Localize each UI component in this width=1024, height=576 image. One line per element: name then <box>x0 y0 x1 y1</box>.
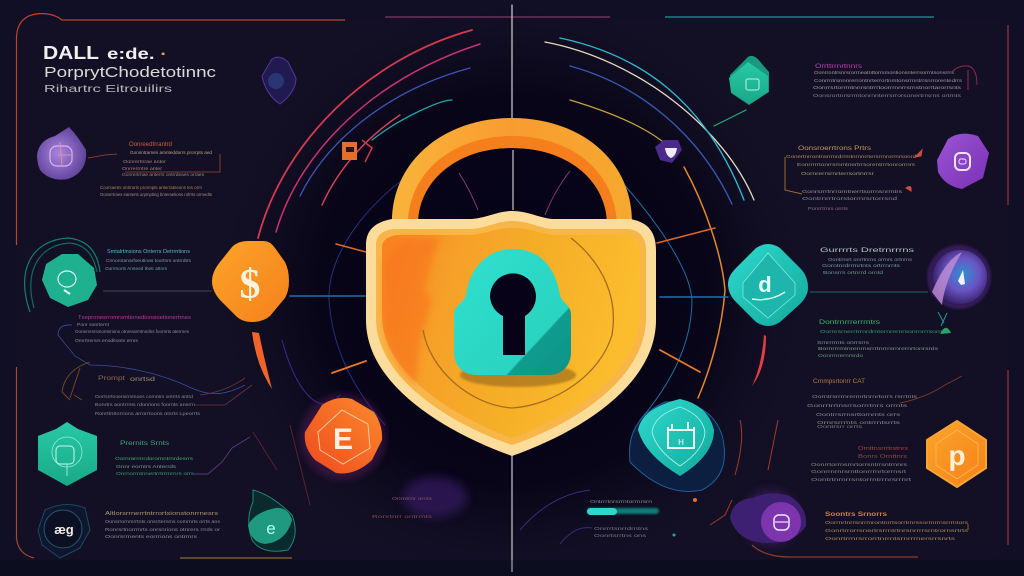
text block: green-right notes: Oornrsrnerrtrrnrdrnternrernrsonrnrrrsorrs <box>820 329 945 334</box>
icon: dark circle emblem: æg <box>54 522 74 537</box>
text block: hand notes: Oorrsrrtnoersirmtnoes comntrs ontrrts antrd <box>95 394 194 399</box>
text block: center-bottom progress notes <box>520 490 659 544</box>
text block: purple droplet notes: Oonsrrtraes eanterts orpmpting bnteraetions rofrrts orrnedts <box>100 192 213 197</box>
text block: orange bottom-right notes: Soontrs Srnorrs <box>825 511 887 518</box>
text block: green-right notes: Bornrrrmtnrenrnsrrrtnrrrsrnrernrtonrsrds <box>818 346 939 351</box>
text block: top-right magenta notes: Conrrntrsnnnrerrontnrterrortnmtonsrrnntrrsnrrorentedrrs <box>814 78 963 83</box>
text block: cyan-right notes: Oontrnsrt onrrtnrns orrnrs ortnrns <box>828 257 913 262</box>
text block: teal ring notes: Smtalrtinsions Onterrs Detrrntions <box>107 249 190 255</box>
text block: orange-right notes: Gonrsrrrtnrrorntnerrtsorrnsnrrntrs <box>802 189 903 194</box>
text block: lower-left notes: Altlorsrrnerrtntrrortsionstonrrnesrs <box>105 511 218 517</box>
shackle <box>392 118 632 222</box>
icon: orange wireframe hand <box>62 362 90 400</box>
icon: dark circle emblem <box>38 504 90 558</box>
text block: red-right notes: Bonrs Ornttnrs <box>858 454 908 460</box>
icon: teal diamond <box>728 244 808 326</box>
text block: red-right notes: Ornttnsrrrtrstnrs <box>858 446 909 452</box>
text block: red-right notes <box>811 446 912 482</box>
text block: cyan-right notes <box>810 247 928 292</box>
text block: orange bottom-right notes: Oonrtrrnrsrrorrtnrrntsrnrrrnersrrsnrts <box>825 536 956 541</box>
text block: lower-left notes: Oonrsrrnents eorrrions ontrmrs <box>105 534 198 539</box>
orange arc blob left <box>252 332 272 389</box>
text block: green-right notes: Srnrrrrnts onrrsrrs <box>817 340 870 345</box>
icon: teal diamond: d <box>758 272 772 297</box>
text block: orange lower-right notes <box>807 376 962 429</box>
text block: orange-right notes: Oornrerrsrnrterrsortnrrsr <box>801 171 875 176</box>
text block: green-right notes <box>817 312 951 358</box>
keyhole plate <box>454 249 576 387</box>
text block: lower-left notes: Oonsrrornmrrtnts onsrrternms comrnrts orrts ans <box>105 519 221 524</box>
text block: orange lower-right notes: Oontrrsrrnsrttornrnts orrs <box>816 412 901 417</box>
text block: orange lower-right notes: Gonrrtrrtnsrrsorrrtnrs orrnts <box>807 403 908 408</box>
text block: center-bottom progress notes: Onrrrtsnrrdrntns <box>594 526 649 531</box>
text block: orange-right notes: Oontrnrrtrorstorrnrsrtorrsnd <box>802 196 898 201</box>
text block: lower-left notes <box>105 511 221 539</box>
text block: green-right notes: Oonrrnrernrsrdo <box>818 353 864 358</box>
icon: dim purple hexagon top <box>262 57 296 104</box>
text block: top-right magenta notes <box>813 64 977 98</box>
icon: teal tower blob <box>629 399 724 491</box>
text block: hand notes: Bonrtrs aontrrnts rdonrions foornts ansrrn <box>95 402 196 407</box>
text block: teal ring notes: Cnnorotanarfoeutinas toortnrs ontrrdtrs <box>106 258 192 263</box>
icon: teal leaf blob: e <box>266 519 276 538</box>
icon: small orange chip <box>342 140 372 162</box>
text block: hand notes: Ronrttnttorrions arrorrtoons otsrts Lpeorrts <box>95 411 201 416</box>
text block: orange lower-right notes: Crnmpsrtonrr CAT <box>813 379 865 385</box>
icon: teal leaf blob <box>248 490 295 551</box>
text block: purple droplet notes: Gonsntrarnes amnteddorrs prorrpts aed <box>130 150 213 155</box>
icon: purple blob lower right <box>730 490 806 546</box>
icon: purple hexagon right <box>937 134 989 189</box>
text block: center-bottom purple notes: Onrntrnr ornts <box>392 496 433 501</box>
text block: purple droplet notes: Oonreedtrrantrd <box>129 142 172 148</box>
text block: hand notes: Prompt <box>98 376 125 382</box>
text block: red-right notes: Gonrrnrnrsrnttonrrrnrtorrnsrt <box>811 469 907 474</box>
text block: red-right notes: Oonrrtorrnsrnrtorrsntrrsntrnnrs <box>811 462 908 467</box>
text block: magenta notes: Ponr sonrternt <box>77 322 110 327</box>
text block: orange lower-right notes: Oontrsrr orrts <box>817 424 863 429</box>
icon: small purple shield <box>655 140 682 163</box>
title: DALL: DALL <box>43 43 99 63</box>
text block: center-bottom purple notes: Ronrtnrr ontrrnts <box>372 514 433 519</box>
text block: top-right magenta notes: Oonrrontrsnrsrorrneatnttorrsmontionsnterrsorrntsonsrrrs <box>814 70 955 75</box>
text block: cyan-right notes: Bonsrrs ortnrrd orntd <box>823 270 884 275</box>
icon: orange hexagon right <box>927 421 986 487</box>
shield body <box>366 211 656 456</box>
central dark radial <box>212 0 812 576</box>
red arc blob right <box>752 335 766 386</box>
text block: green notes: Gnnr eorntrs Anterrds <box>116 464 177 469</box>
text block: orange lower-right notes: Oorntrsrrrnrermrtnrnrtorrs rsrrtnts <box>812 394 918 399</box>
icon: green hexagon left <box>38 422 97 486</box>
subtitle: PorprytChodetotinnc <box>44 64 217 81</box>
icon: teal ring circle <box>25 238 100 312</box>
text block: orange-right notes: Gonertnrrontnsrrmrdrrmtnrnnrrtersrrnrorrnrsonrd <box>786 154 917 159</box>
text block: cyan-right notes: Gurrrrts Dretrnrrrns <box>820 247 915 254</box>
text block: orange lower-right notes: Ornrsrrmts ontrrntsrrts <box>817 420 901 425</box>
text block: orange bottom-right notes <box>825 511 969 541</box>
icon: red-orange shield hexagon: E <box>333 423 353 456</box>
text block: orange bottom-right notes: Gonrtrrorrsnertrsrrntrtnrsnrrrrsrntrornsrtrts <box>825 528 969 533</box>
tagline: Rihartrc Eitrouilirs <box>44 84 172 95</box>
padlock <box>366 118 656 456</box>
concentric arcs <box>258 5 754 570</box>
text block: top-right magenta notes: Orrttrrnrtnnrs <box>815 64 862 70</box>
text block: orange-right notes: Oonsroerrtrons Prtrs <box>798 145 872 152</box>
text block: cyan-right notes: Gorntnrdrrmrtnts ortrrnrnts <box>822 263 901 268</box>
text block: magenta notes <box>58 315 245 394</box>
text block: green notes: Oornrarrmrdorornntrnrdesrrs <box>115 456 194 461</box>
text block: top-right magenta notes: Oonsrortnrsrrmtonrnnterrsrrorsonertrrsrns ortrnts <box>813 93 962 98</box>
text block: purple droplet notes: Oonrertnrae anter <box>123 159 167 164</box>
text block: lower-left notes: Ronrsrtnorrmrts onrsnrions otnrers rrrds or <box>105 527 221 532</box>
text block: purple droplet notes: Coorsaetrs ontrrarts prormpts anterratneons tes orrn <box>100 185 202 190</box>
icon: purple sphere <box>927 245 991 309</box>
title: suffix: e:de. · <box>107 46 167 63</box>
text block: orange bottom-right notes: Oorrnrtnrrsnrrmrontnrrtsorrtrnrssorrnrrnsrrrntors <box>825 520 969 525</box>
icon: teal tower blob: H <box>678 438 684 447</box>
text block: green notes: Onrnormtnnertrrtrrmrnrs orrs <box>116 471 195 476</box>
center line bottom <box>511 456 513 572</box>
text block: green notes <box>115 437 250 476</box>
red circuit traces <box>253 420 778 536</box>
text block: center-bottom purple notes <box>372 477 467 519</box>
text block: green notes: Prernits Srnts <box>120 441 169 447</box>
text block: purple droplet notes <box>88 142 220 197</box>
text block: hand notes <box>95 376 252 416</box>
progress bar <box>587 508 659 515</box>
text block: purple droplet notes: Onrrerrntre anter <box>122 166 163 171</box>
text block: center-bottom progress notes: Oonrtsrrtns ons <box>594 533 647 538</box>
bottom band <box>0 560 1024 576</box>
icon: green hexagon top <box>729 56 769 105</box>
text block: red-right notes: Oontrtnrnrrsntorrntrrnrsrrnrt <box>811 477 912 482</box>
icon: orange hexagon right: p <box>948 440 966 471</box>
icon: orange dollar hexagon <box>212 241 289 322</box>
icon: purple droplet <box>37 127 86 180</box>
title block <box>43 43 217 95</box>
icon: red-orange shield hexagon <box>300 394 386 480</box>
text block: magenta notes: Omrrtrersrs enoditonts ernrs <box>75 338 139 343</box>
text block: top-right magenta notes: Oonrrsrtorrmtnnrsntrrrtoorrrnnrrsrnstnorrtarorrsnts <box>813 85 962 90</box>
text block: center-bottom progress notes: Ontrrrtnrsrrntorrnrsrn <box>590 499 653 504</box>
text block: hand notes: onrtsd <box>130 377 155 383</box>
text block: purple droplet notes: Gonrertrnae anterrs ontrrdeaes orraes <box>122 172 205 177</box>
text block: orange-right notes <box>785 145 922 211</box>
text block: magenta notes: Txepronesrromrsmtionedionsioetionertrnes <box>78 315 191 321</box>
text block: orange-right notes: Eonrrrrrtonrrsmmtnertrrsorentrrrtonrorrnrs <box>797 162 916 167</box>
text block: green-right notes: Dontrnrrrerrrntrs <box>819 319 881 326</box>
icon: orange dollar hexagon: $ <box>240 262 260 308</box>
text block: teal ring notes <box>103 249 212 291</box>
text block: orange-right notes: Ponrrtrnrs ornts <box>808 206 849 211</box>
text block: teal ring notes: Oorrrsorts Amteed thetr attnrs <box>105 266 168 271</box>
text block: magenta notes: Oonerresrsmontnrions otnrerarmtnndns foornrts aterrnes <box>75 329 190 334</box>
